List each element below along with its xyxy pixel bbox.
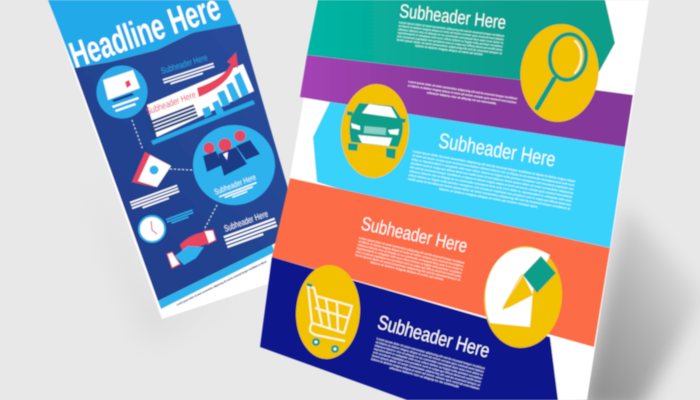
subheader: orange band: Subheader Here <box>359 214 469 258</box>
right poster <box>260 0 649 400</box>
navy body <box>74 24 300 301</box>
text block: navy band: sint occaecat cupidatat non proident sunt in culpa qui officia deserunt mollit anim <box>373 350 482 384</box>
text block: navy band: ut labore et dolore magna aliqua ut enim ad minim veniam quis nostrud exercitation <box>375 340 484 374</box>
text block: cyan band: labore et dolore magna aliqua ut enim ad minim veniam quis <box>439 187 538 209</box>
text block: cyan band: ullamco laboris nisi ut aliquip ex ea commodo consequat duis aute irure dolor in reprehenderit in voluptate velit esse <box>409 169 572 203</box>
band: cyan <box>313 102 625 248</box>
subheader: people: Subheader Here <box>213 172 258 197</box>
text block: navy band: labore et dolore magna aliqua ut enim ad minim veniam quis nostrud exercitation <box>371 357 480 391</box>
shadow: left poster <box>85 170 240 340</box>
text block: purple band: Lorem ipsum dolor sit amet consectetur adipiscing elit sed do eiusmod tempor incididunt <box>408 79 517 101</box>
subheader: navy band: Subheader Here <box>375 312 492 363</box>
band: orange <box>272 178 610 347</box>
icon: car <box>338 82 412 180</box>
bar chart <box>202 72 249 118</box>
icon: magnifier <box>516 20 603 126</box>
text block: cyan band <box>407 149 576 215</box>
text block: orange band: lorem ipsum dolor sit amet consectetur adipiscing elit sed do eiusmod tempor ut <box>355 253 461 282</box>
text block: purple band: ullamco laboris nisi ut aliquip ex ea commodo <box>427 91 497 105</box>
text block: navy band: reprehenderit in voluptate velit esse cillum dolore eu fugiat nulla pariatur excepteur <box>373 347 483 381</box>
text block: money <box>130 185 180 212</box>
text block: orange band: sint occaecat cupidatat non proident sunt in culpa qui officia deserunt mollit anim <box>356 249 462 279</box>
text block: orange band: ullamco laboris nisi ut aliquip ex ea commodo consequat duis aute irure dolor in <box>357 243 463 272</box>
text block: orange band: reprehenderit in voluptate velit esse cillum dolore eu fugiat nulla pariatur excepteur <box>356 246 463 275</box>
band: teal <box>307 0 615 92</box>
text block: teal band: labore et dolore magna aliqua ut enim ad minim <box>415 44 483 56</box>
text block: teal band: reprehenderit in voluptate velit esse cillum dolore eu fugiat nulla pariatur excepteur <box>397 31 504 49</box>
subheader: cyan band: Subheader Here <box>437 130 557 172</box>
icon: shopping cart <box>294 263 362 361</box>
footer text: Lorem ipsum dolor sit amet consectetur adipiscing elit sed do eiusmod tempor incididunt ut labore <box>176 259 268 307</box>
subheader: teal band: Subheader Here <box>398 1 507 34</box>
shadow: right poster <box>580 205 700 400</box>
band: navy <box>260 257 558 400</box>
text block: clock <box>166 209 194 225</box>
text block: teal band: lorem ipsum dolor sit amet consectetur adipiscing elit sed do eiusmod tempor ut <box>396 38 502 55</box>
text block: teal band: Lorem ipsum dolor sit amet consectetur adipiscing elit sed do eiusmod tempor incididunt <box>399 20 504 38</box>
text block: navy band: ullamco laboris nisi ut aliquip ex ea commodo consequat duis aute irure dolor in <box>374 343 484 377</box>
people circle <box>193 125 275 205</box>
text block: cyan band: mollit anim id est laborum lorem ipsum dolor sit amet consectetur adipiscing elit sed do eiusmod tempor incididunt ut <box>408 177 570 211</box>
cyan header <box>48 0 240 68</box>
connector <box>170 169 192 170</box>
text block: bottom right <box>224 218 279 248</box>
text block: teal band: ut labore et dolore magna aliqua ut enim ad minim veniam quis nostrud exercitation <box>398 24 504 41</box>
text block: cyan band: elit sed do eiusmod tempor incididunt ut labore et dolore magna aliqua ut enim ad minim veniam quis nostrud exercitation <box>410 165 573 199</box>
text block: navy band: ullamco laboris nisi ut aliquip ex ea commodo <box>389 366 460 389</box>
text block: teal band: ullamco laboris nisi ut aliquip ex ea commodo consequat duis aute irure dolor in <box>398 27 504 45</box>
table rows <box>147 104 198 134</box>
icon: handshake <box>167 230 216 268</box>
bottom stripe <box>158 245 275 309</box>
text block: cyan band: ut enim ad minim veniam quis nostrud exercitation ullamco laboris nisi ut aliquip ex ea commodo consequat duis aute irure <box>412 153 575 187</box>
connector <box>205 205 217 228</box>
text block: orange band <box>354 236 466 285</box>
text block: navy band: lorem ipsum dolor sit amet consectetur adipiscing elit sed do eiusmod tempor ut <box>372 353 481 387</box>
poster sheet <box>48 0 310 319</box>
band: purple <box>300 55 633 147</box>
text block: cyan band: Lorem ipsum dolor sit amet consectetur adipiscing elit sed do eiusmod tempor incididunt ut labore et dolore magna aliqua <box>413 149 576 183</box>
subheader: panel: Subheader Here <box>145 90 197 118</box>
subheader: top: Subheader Here <box>160 52 209 76</box>
subheader: bottom right: Subheader Here <box>223 209 269 234</box>
text block: orange band: Lorem ipsum dolor sit amet consectetur adipiscing elit sed do eiusmod tempor incididunt <box>359 236 465 265</box>
text block: orange band: ut labore et dolore magna aliqua ut enim ad minim veniam quis nostrud exercitation <box>358 239 464 268</box>
text block: top <box>163 63 215 86</box>
text block: teal band <box>396 20 505 59</box>
text block: cyan band: dolor in reprehenderit in voluptate velit esse cillum dolore eu fugiat nulla pariatur excepteur sint occaecat cupidatat non <box>411 157 574 191</box>
poster sheet <box>260 0 649 400</box>
dashed connector <box>132 120 143 150</box>
icon: monitor circle <box>96 66 148 118</box>
icon: money <box>132 152 171 187</box>
text block: purple band: ut labore et dolore magna aliqua ut enim ad minim veniam quis nostrud exercitation <box>408 83 517 105</box>
text block: navy band <box>370 337 486 394</box>
text block: cyan band: cillum dolore eu fugiat nulla pariatur excepteur sint occaecat cupidatat non proident sunt in culpa qui officia deserunt <box>408 173 571 207</box>
text block: cyan band: proident sunt in culpa qui officia deserunt mollit anim id est laborum lorem ipsum dolor sit amet consectetur adipiscing <box>410 161 574 195</box>
text block: teal band: sint occaecat cupidatat non proident sunt in culpa qui officia deserunt mollit anim <box>397 34 503 52</box>
text block: orange band: labore et dolore magna aliqua ut enim ad minim <box>370 260 444 282</box>
arrow <box>197 52 238 97</box>
chart panel <box>145 52 255 145</box>
icon: pencil <box>479 242 567 352</box>
icon: clock <box>139 216 165 242</box>
text block: navy band: Lorem ipsum dolor sit amet consectetur adipiscing elit sed do eiusmod tempor incididunt <box>376 337 485 370</box>
left poster <box>48 0 310 319</box>
